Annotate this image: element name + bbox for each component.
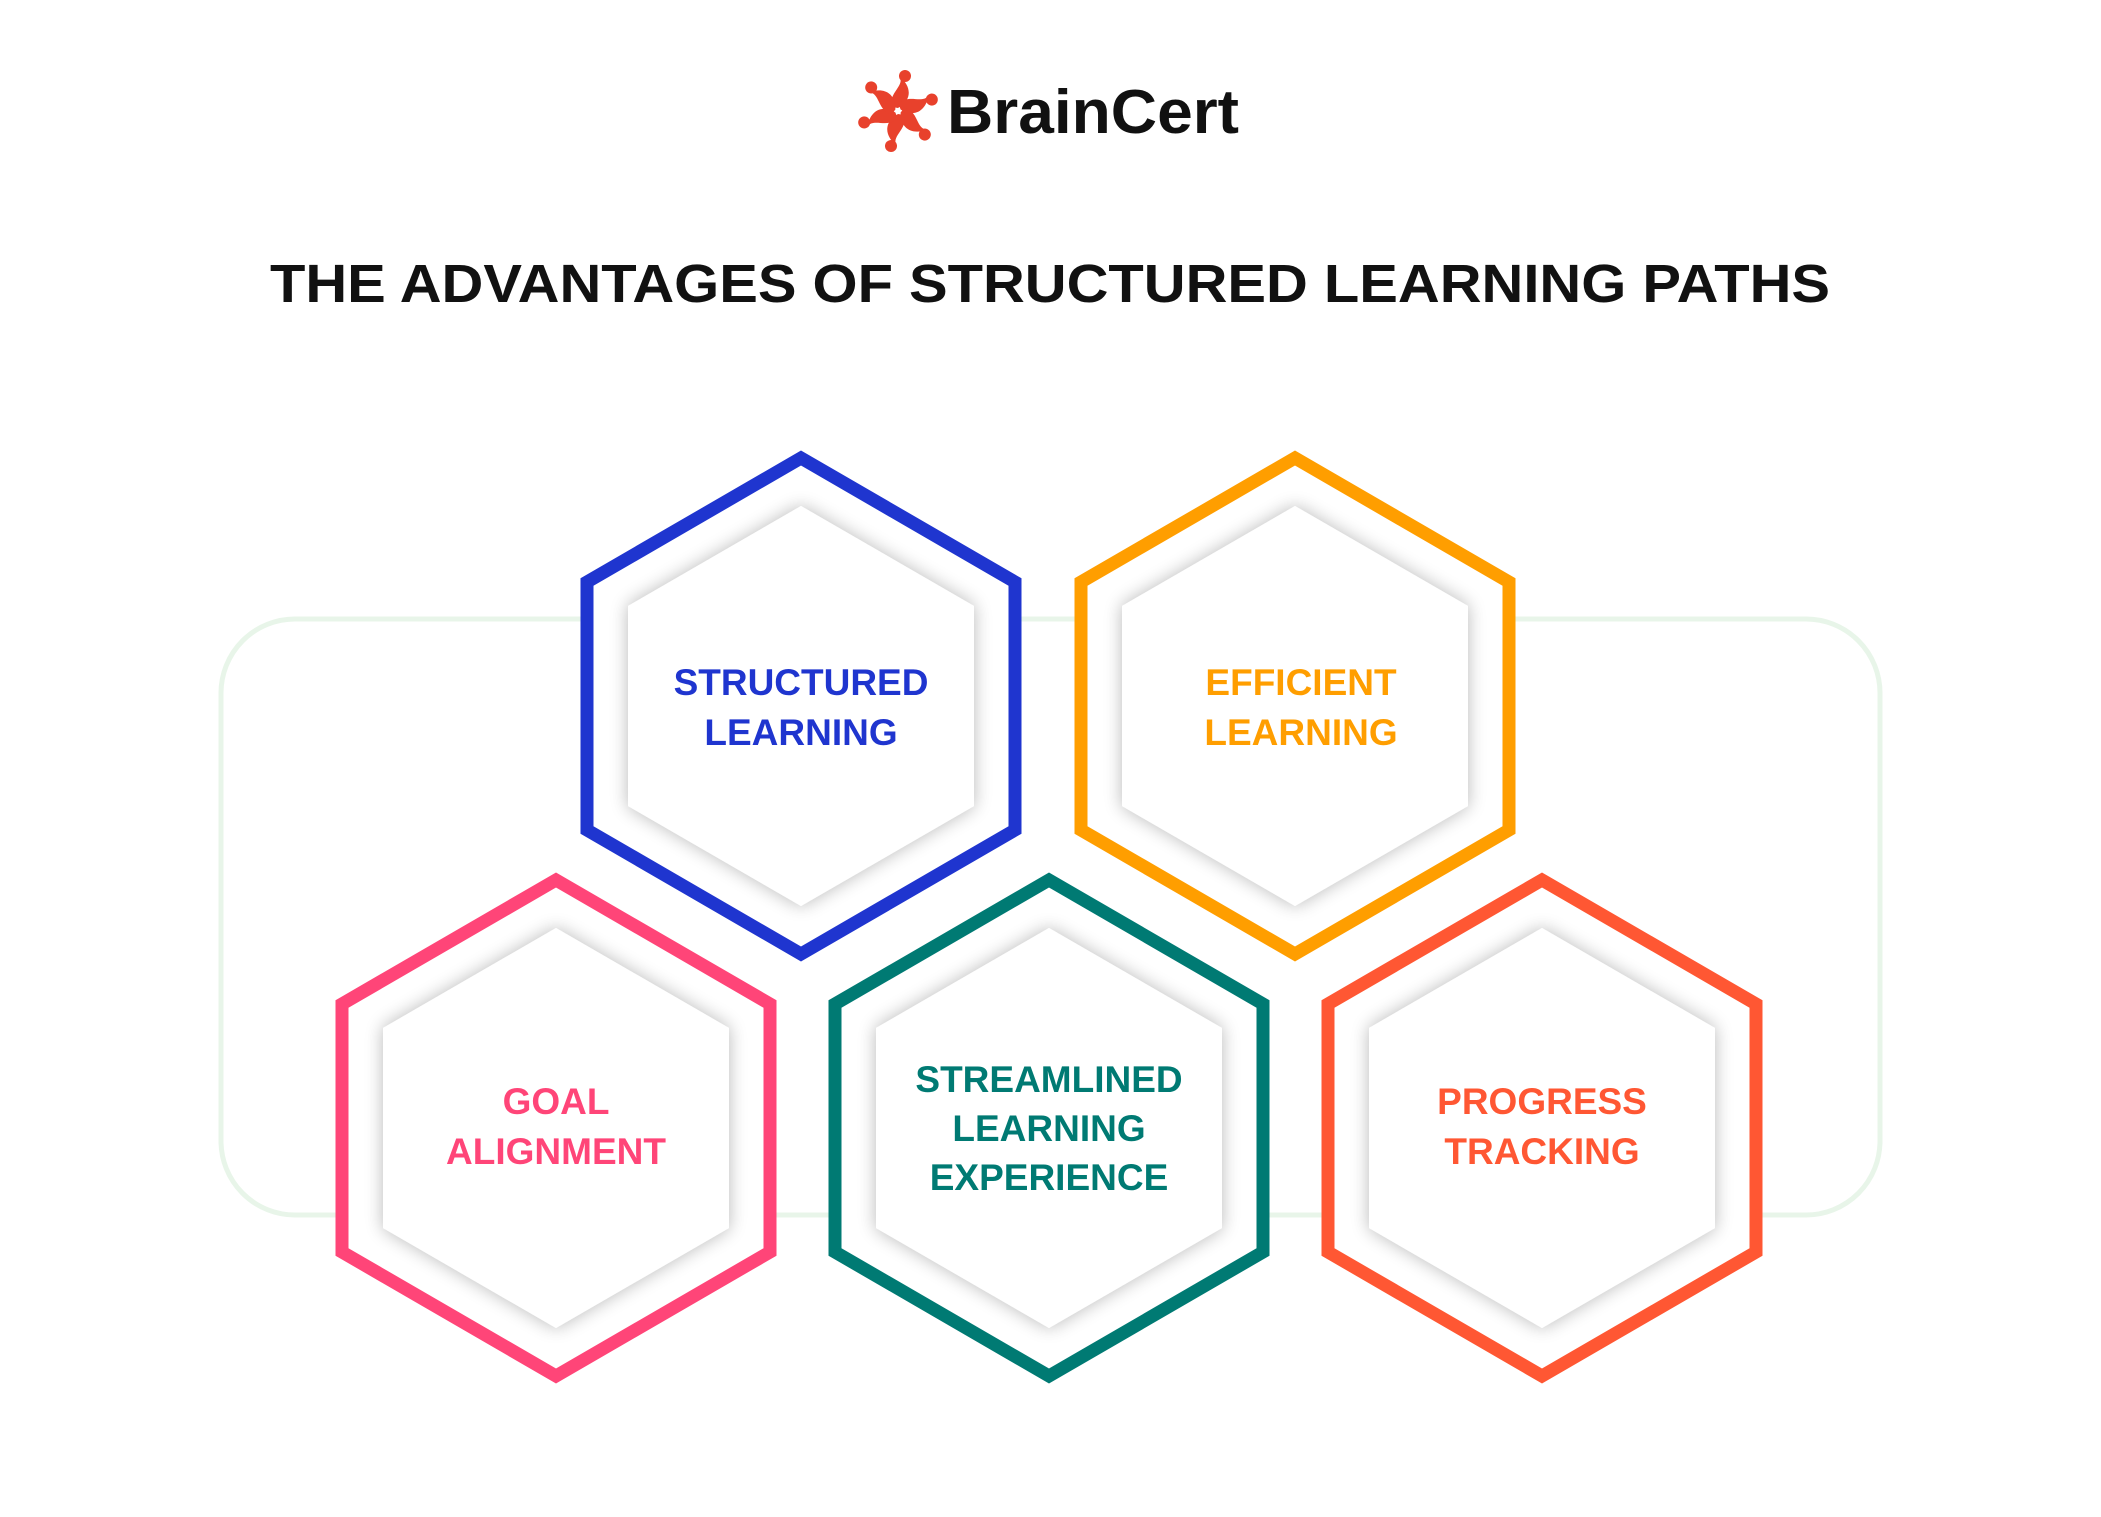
icon: braincert flower bbox=[856, 70, 940, 152]
hexagon: goal alignment: GOAL bbox=[503, 1081, 609, 1122]
hexagon: progress tracking: TRACKING bbox=[1444, 1131, 1640, 1172]
hexagon: goal alignment: ALIGNMENT bbox=[446, 1131, 666, 1172]
background rounded frame bbox=[221, 619, 1880, 1215]
hexagon: structured learning: STRUCTURED bbox=[674, 662, 928, 703]
hexagon: efficient learning: LEARNING bbox=[1204, 712, 1398, 753]
hexagon: streamlined learning experience: LEARNING bbox=[952, 1108, 1146, 1149]
logo text: BrainCert bbox=[947, 78, 1239, 147]
logo bbox=[856, 70, 1239, 152]
hexagon: structured learning: LEARNING bbox=[704, 712, 898, 753]
hexagon: goal alignment bbox=[342, 880, 770, 1376]
hexagon: progress tracking bbox=[1328, 880, 1756, 1376]
hexagon: streamlined learning experience: STREAMLINED bbox=[915, 1059, 1183, 1100]
hexagon: efficient learning: EFFICIENT bbox=[1205, 662, 1397, 703]
hexagon: streamlined learning experience: EXPERIENCE bbox=[930, 1157, 1168, 1198]
hexagon: structured learning bbox=[587, 458, 1015, 954]
hexagon: streamlined learning experience bbox=[835, 880, 1263, 1376]
title: THE ADVANTAGES OF STRUCTURED LEARNING PATHS bbox=[270, 254, 1830, 314]
hexagon: efficient learning bbox=[1081, 458, 1509, 954]
hexagon: progress tracking: PROGRESS bbox=[1437, 1081, 1647, 1122]
